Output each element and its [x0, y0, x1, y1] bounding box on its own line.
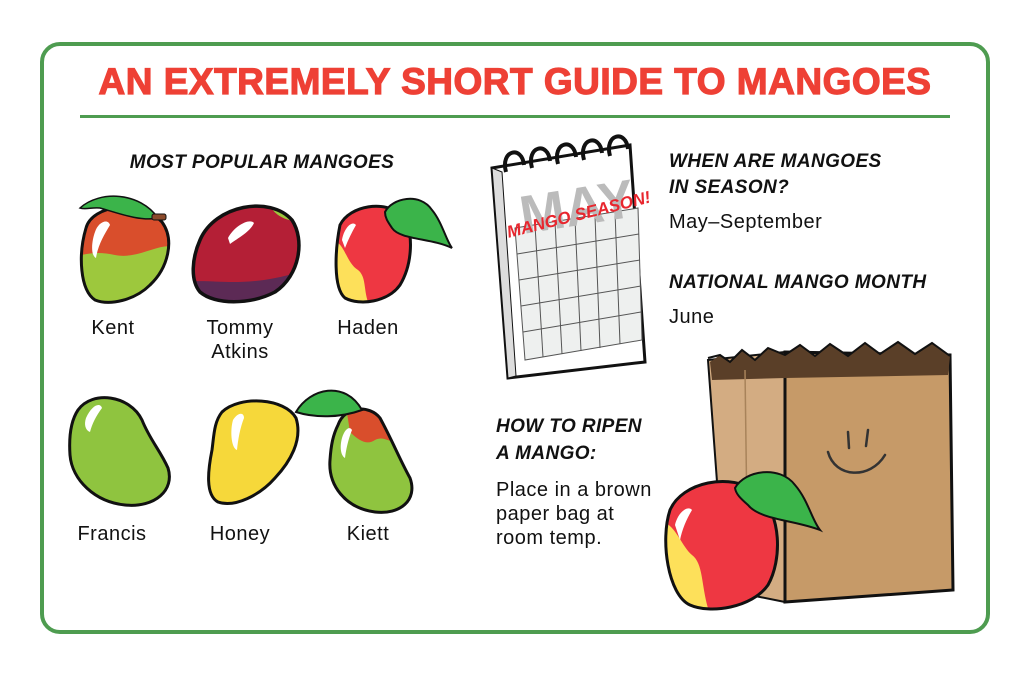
mango: Kiett [294, 390, 414, 514]
label: Haden: Haden [337, 317, 399, 339]
text: how to ripen: A MANGO: [495, 443, 597, 464]
mango: Kent [78, 195, 170, 304]
frame [42, 44, 988, 632]
text: how to ripen [495, 416, 652, 549]
text: season: IN SEASON? [669, 177, 789, 198]
mango: Haden [330, 199, 452, 310]
icon: calendar: MAY [516, 169, 639, 246]
label: Kiett: Kiett [347, 523, 389, 545]
title: AN EXTREMELY SHORT GUIDE TO MANGOES [99, 61, 931, 102]
text: how to ripen: paper bag at [496, 503, 614, 525]
heading: most popular mangoes: MOST POPULAR MANGOES [130, 152, 394, 173]
text: season: WHEN ARE MANGOES [669, 151, 882, 172]
text: season: May–September [669, 211, 822, 233]
mango: Tommy Atkins [191, 204, 301, 304]
label: Kent: Kent [91, 317, 135, 339]
text: national mango month: June [669, 306, 714, 328]
icon: calendar [492, 136, 653, 378]
icon: paper bag [708, 342, 953, 602]
icon: big mango [664, 471, 823, 610]
text: how to ripen: Place in a brown [496, 479, 652, 501]
mango: Honey [209, 401, 298, 503]
text: national mango month: NATIONAL MANGO MONTH [669, 272, 927, 293]
text: national mango month [669, 272, 927, 328]
label: Francis: Francis [77, 523, 147, 545]
text: how to ripen: HOW TO RIPEN [496, 416, 643, 437]
label: Tommy Atkins: Tommy [207, 317, 273, 339]
text: season [669, 151, 882, 233]
label: Honey: Honey [210, 523, 270, 545]
text: Atkins [211, 341, 269, 363]
icon: calendar: MANGO SEASON! [505, 188, 653, 242]
text: how to ripen: room temp. [496, 527, 602, 549]
mango: Francis [70, 398, 169, 505]
